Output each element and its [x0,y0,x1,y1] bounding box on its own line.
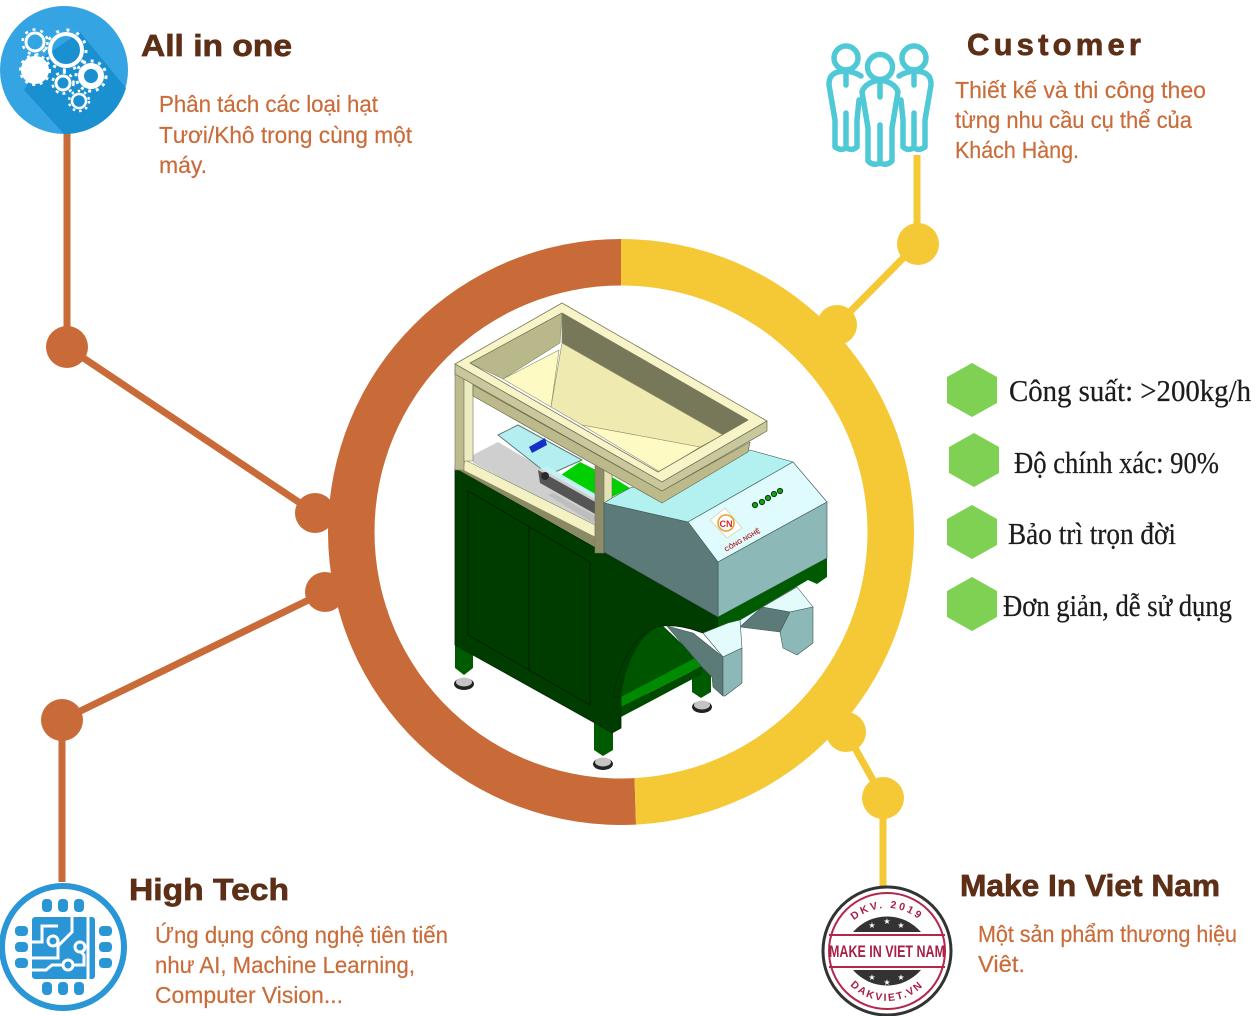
icon: Make in Viet Nam stamp [822,886,952,1016]
frame posts [455,370,612,553]
rear leg and foot [692,660,712,713]
front chute [667,620,742,696]
feature: accuracy: Độ chính xác: 90% [1014,445,1219,480]
hopper interior [470,313,748,472]
hexagon bullet 2 [949,433,999,487]
front left leg and foot [454,640,474,690]
heading: High Tech: High Tech [129,872,289,907]
text: High Tech description [155,922,448,1008]
front leg and foot [593,720,613,770]
text: High Tech description: Computer Vision... [155,982,343,1008]
text: Customer description: từng nhu cầu cụ thể của [955,107,1192,133]
logo card: CN [720,519,732,529]
hopper funnel underside [473,385,750,503]
icon: Make in Viet Nam stamp: ★ [897,921,905,930]
heading: Customer: Customer [967,27,1141,62]
icon: Make in Viet Nam stamp: DKV. 2019 [850,901,922,920]
text: All in one description [159,91,413,178]
text: Make In Viet Nam description [978,921,1237,977]
text: Customer description: Thiết kế và thi công theo [955,77,1206,103]
machine cover [604,450,827,617]
text: Make In Viet Nam description: Một sản phẩm thương hiệu [978,921,1237,947]
yellow connector lines [837,155,917,888]
hexagon bullet 3 [947,505,997,559]
hopper top frame [455,303,767,482]
status lights [752,488,783,508]
feature: maintenance: Bảo trì trọn đời [1008,516,1176,551]
text: High Tech description: Ứng dụng công nghệ tiên tiến [155,922,448,948]
heading: Make In Viet Nam: Make In Viet Nam [960,868,1220,903]
text: All in one description: Tươi/Khô trong cùng một [159,122,413,148]
icon: Make in Viet Nam stamp: ★ [868,921,876,930]
text: All in one description: máy. [159,152,207,178]
central ring [328,239,914,825]
icon: Make in Viet Nam stamp: ★ [897,973,905,982]
cabinet doors [468,491,590,705]
green strip under cover [718,558,827,640]
text: Customer description: Khách Hàng. [955,137,1079,163]
icon: circuit chip [2,886,124,1008]
conveyor parts [498,425,630,523]
text: High Tech description: như AI, Machine Learning, [155,952,415,978]
cream base rail [455,460,597,548]
hexagon bullet 4 [947,577,997,631]
text: All in one description: Phân tách các loại hạt [159,91,379,117]
hopper frame lip [455,364,767,491]
orange connector nodes [41,326,345,741]
icon: Make in Viet Nam stamp: ★ [868,973,876,982]
arch interior and shelf [612,625,702,717]
green cabinet body [455,468,718,733]
logo card [710,508,762,554]
icon: Make in Viet Nam stamp: MAKE IN VIET NAM [829,942,945,961]
machine illustration [454,303,827,770]
heading: All in one: All in one [141,28,292,63]
rear chute [740,587,813,655]
orange connector lines [62,130,325,882]
grey table [473,442,597,527]
text: Customer description [955,77,1206,163]
yellow connector nodes [817,223,939,819]
icon: gears [0,6,128,134]
icon: Make in Viet Nam stamp: ★ [883,978,891,987]
text: Make In Viet Nam description: Viêt. [978,951,1025,977]
hexagon bullet 1 [947,363,997,417]
icon: people [829,46,931,164]
icon: Make in Viet Nam stamp: ★ [883,917,891,926]
feature list [947,363,1251,631]
logo card: CÔNG NGHỆ [722,526,762,554]
icon: Make in Viet Nam stamp: DAKVIET.VN [850,980,922,1001]
